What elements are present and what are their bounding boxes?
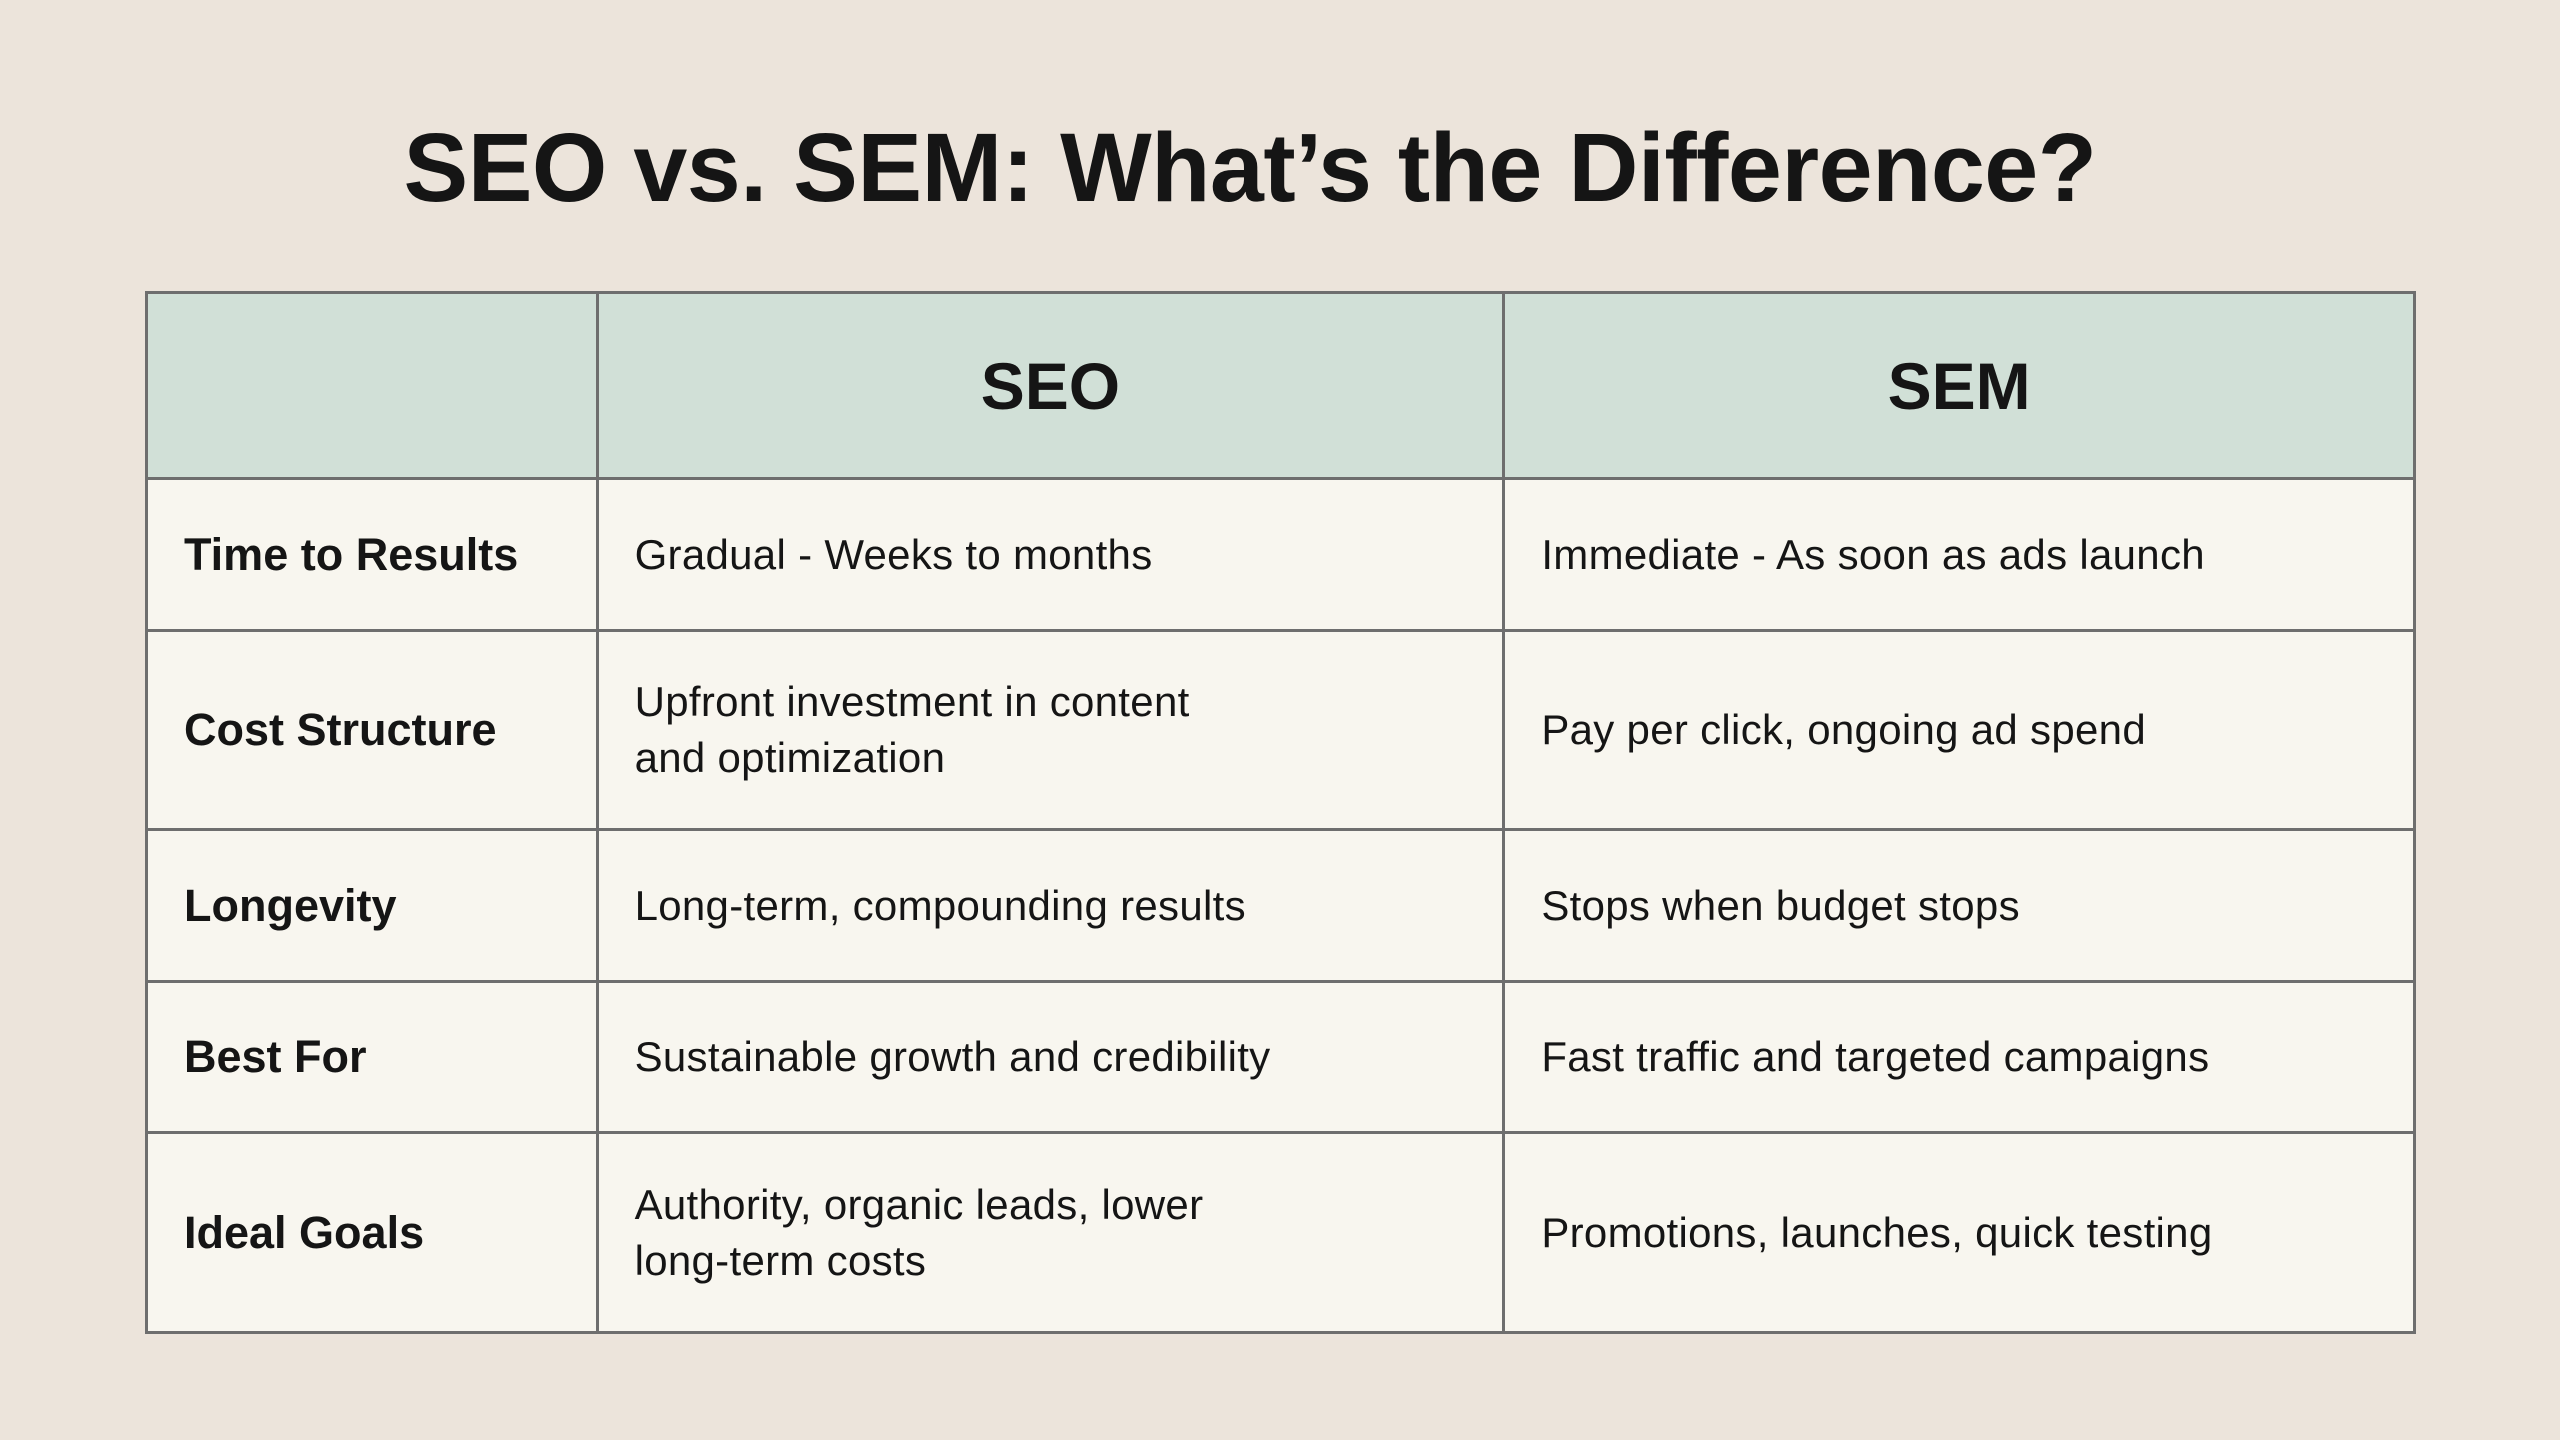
row: best for: Sustainable growth and credibility bbox=[635, 1033, 1270, 1080]
row: time to results: Gradual - Weeks to months bbox=[635, 530, 1153, 578]
row: best for bbox=[148, 983, 2413, 1131]
row: cost structure bbox=[148, 632, 2413, 828]
title: SEO vs. SEM: What’s the Difference? bbox=[404, 113, 2096, 222]
comparison table bbox=[145, 291, 2416, 1334]
row: cost structure: Upfront investment in content bbox=[635, 678, 1190, 725]
row: cost structure: Cost Structure bbox=[184, 704, 497, 755]
row: ideal goals: Ideal Goals bbox=[184, 1206, 424, 1258]
row: ideal goals: Promotions, launches, quick testing bbox=[1541, 1208, 2212, 1256]
row: time to results bbox=[148, 480, 2413, 629]
row: best for: Best For bbox=[184, 1031, 367, 1082]
row: time to results: Time to Results bbox=[184, 528, 518, 580]
header row: SEO bbox=[981, 348, 1120, 422]
row: best for: Fast traffic and targeted campaigns bbox=[1541, 1033, 2209, 1080]
row: ideal goals bbox=[148, 1134, 2413, 1331]
row: longevity: Stops when budget stops bbox=[1541, 882, 2020, 928]
row: cost structure: Pay per click, ongoing ad spend bbox=[1541, 706, 2146, 753]
row: ideal goals: Authority, organic leads, lower bbox=[635, 1180, 1203, 1228]
row: ideal goals: long-term costs bbox=[635, 1236, 926, 1284]
header row: SEM bbox=[1888, 348, 2031, 422]
header row bbox=[148, 294, 2413, 1331]
row: longevity bbox=[148, 831, 2413, 980]
row: time to results: Immediate - As soon as ads launch bbox=[1541, 530, 2205, 578]
row: longevity: Long-term, compounding results bbox=[635, 882, 1246, 928]
row: longevity: Longevity bbox=[184, 880, 397, 930]
row: cost structure: and optimization bbox=[635, 734, 945, 781]
